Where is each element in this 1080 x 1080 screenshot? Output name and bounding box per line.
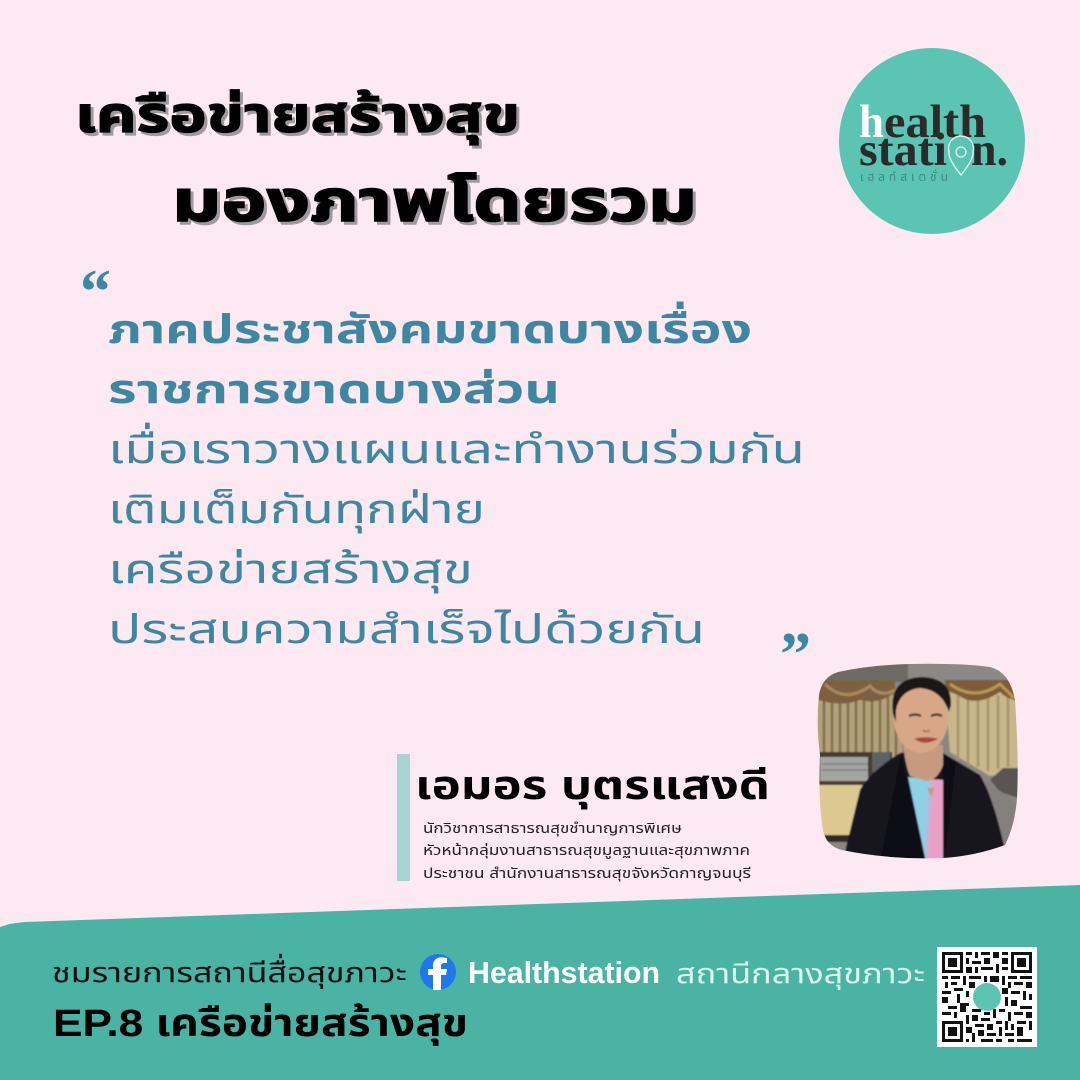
quote text: เครือข่ายสร้างสุข — [108, 548, 473, 593]
speaker title: ประชาชน สำนักงานสาธารณสุขจังหวัดกาญจนบุรี — [423, 865, 751, 882]
logo: health station: stati — [859, 124, 947, 176]
title: line 1: เครือข่ายสร้างสุข — [78, 90, 523, 148]
quote text: เมื่อเราวางแผนและทำงานร่วมกัน — [108, 422, 805, 472]
quote text: ประสบความสำเร็จไปด้วยกัน — [108, 608, 705, 652]
speaker title — [423, 820, 751, 882]
speaker title: นักวิชาการสาธารณสุขชำนาญการพิเศษ — [423, 820, 682, 837]
quote text — [108, 301, 805, 652]
speaker title: หัวหน้ากลุ่มงานสาธารณสุขมูลฐานและสุขภาพภาค — [423, 842, 750, 859]
logo: health station: h — [859, 96, 884, 148]
footer band — [0, 885, 1080, 1080]
footer line: station: สถานีกลางสุขภาวะ — [676, 958, 925, 990]
quote text: ราชการขาดบางส่วน — [108, 367, 560, 412]
speaker name: เอมอร บุตรแสงดี — [415, 764, 770, 810]
footer line: programme: ชมรายการสถานีสื่อสุขภาวะ — [52, 953, 407, 989]
facebook page name: Healthstation — [468, 955, 660, 990]
closing quote mark: ” — [780, 621, 811, 689]
title: line 1: เครือข่ายสร้างสุข — [75, 87, 520, 145]
photo: speaker portrait — [812, 660, 1024, 864]
quote text: ภาคประชาสังคมขาดบางเรื่อง — [108, 301, 752, 352]
logo: health station: เฮลท์สเตชั่น — [860, 169, 948, 184]
QR code — [937, 947, 1037, 1047]
logo: health station — [839, 48, 1025, 234]
logo: health station: ealth — [884, 96, 986, 148]
icon: facebook — [420, 954, 456, 990]
opening quote mark: “ — [80, 258, 111, 326]
accent bar — [397, 754, 410, 881]
quote text: เติมเต็มกันทุกฝ่าย — [108, 488, 485, 533]
episode title: EP.8 เครือข่ายสร้างสุข — [53, 1003, 468, 1046]
title: line 2: มองภาพโดยรวม — [175, 172, 700, 237]
title: line 2: มองภาพโดยรวม — [172, 169, 697, 234]
logo: health station: n. — [971, 124, 1008, 176]
